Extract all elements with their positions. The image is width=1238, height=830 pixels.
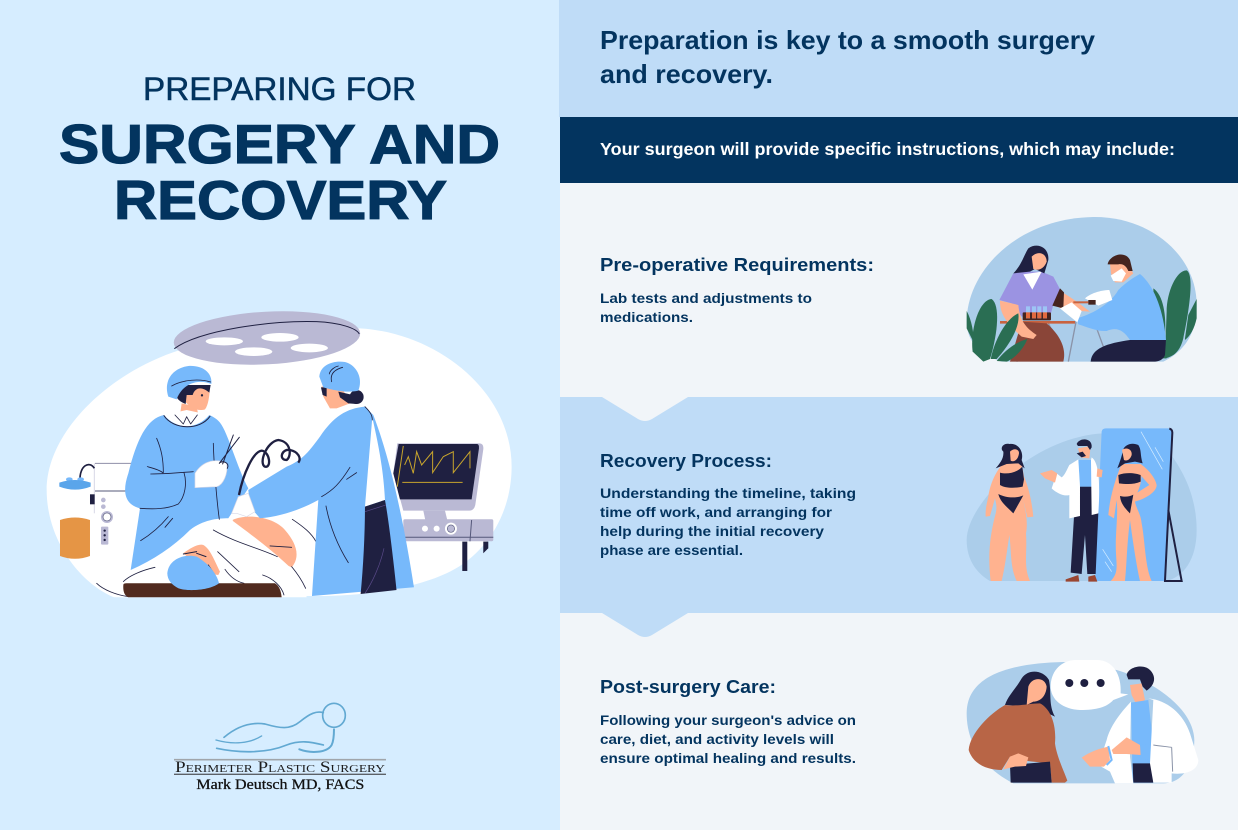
icon: patient — [97, 517, 316, 597]
arrow: recovery to post-surgery — [602, 613, 688, 637]
icon: doctor — [1040, 439, 1103, 582]
title: SURGERY AND — [59, 113, 500, 175]
text block: recovery process: phase are essential. — [600, 542, 743, 558]
title — [59, 71, 500, 231]
heading: preparation — [600, 25, 1096, 89]
icon: monitor — [393, 443, 493, 571]
icon: left surgeon — [125, 366, 248, 570]
text block: pre-operative requirements: medications. — [600, 309, 693, 325]
icon: right surgeon — [232, 362, 414, 596]
text block: post-surgery care: care, diet, and activity levels will — [600, 731, 834, 747]
logo: Perimeter Plastic Surgery: Mark Deutsch MD, FACS — [196, 777, 364, 793]
icon: left equipment — [59, 463, 132, 559]
icon: woman in mirror — [1108, 444, 1157, 581]
illustration: doctor and mirror — [967, 428, 1197, 582]
text block: recovery process: Recovery Process: — [600, 450, 772, 471]
illustration: blood test — [967, 217, 1197, 362]
heading: preparation: Preparation is key to a smooth surgery — [600, 25, 1096, 55]
arrow: pre-operative to recovery — [602, 397, 688, 421]
text block: recovery process — [600, 450, 856, 558]
text block: recovery process: time off work, and arranging for — [600, 504, 833, 520]
text block: post-surgery care: Post-surgery Care: — [600, 676, 776, 697]
illustration: consultation — [967, 660, 1198, 783]
logo: Perimeter Plastic Surgery: Perimeter Plastic Surgery — [175, 759, 385, 776]
text block: pre-operative requirements: Lab tests and adjustments to — [600, 290, 812, 306]
icon: doctor — [1082, 666, 1198, 783]
illustration: operating room — [47, 307, 512, 597]
icon: woman before — [986, 444, 1033, 581]
text block: recovery process: Understanding the timeline, taking — [600, 485, 856, 501]
heading: instruction band text: Your surgeon will provide specific instructions, which may include: — [600, 139, 1175, 159]
panel: post-surgery background — [560, 613, 1238, 830]
icon: surgical lamp — [172, 307, 362, 369]
title: RECOVERY — [114, 169, 447, 231]
panel: instruction band background — [560, 117, 1238, 183]
panel: pre-operative background — [560, 183, 1238, 397]
text block: pre-operative requirements: Pre-operative Requirements: — [600, 254, 874, 275]
logo: Perimeter Plastic Surgery — [174, 703, 386, 793]
icon: mirror — [1095, 428, 1182, 581]
text block: post-surgery care: Following your surgeon's advice on — [600, 712, 856, 728]
text block: post-surgery care: ensure optimal healing and results. — [600, 750, 856, 766]
text block: recovery process: help during the initial recovery — [600, 523, 824, 539]
panel: recovery background — [560, 397, 1238, 613]
panel: left background — [0, 0, 559, 830]
heading: preparation: and recovery. — [600, 59, 773, 89]
icon: speech bubble — [1051, 660, 1128, 710]
icon: reclining figure — [216, 703, 345, 752]
text block: post-surgery care — [600, 676, 856, 766]
text block: pre-operative requirements — [600, 254, 874, 325]
icon: woman — [969, 672, 1067, 783]
panel: top right heading background — [559, 0, 1238, 117]
title: PREPARING FOR — [143, 71, 416, 107]
